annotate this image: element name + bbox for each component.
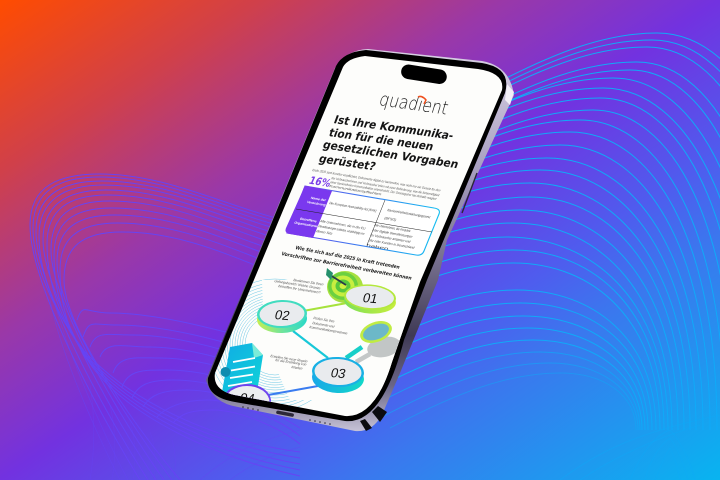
label 01: Geltungsbereich: Welche Gesetze <box>274 279 321 290</box>
table: cells: deren Sitz <box>316 229 333 236</box>
phone: bottom ports and speaker <box>242 406 331 425</box>
connector 02-03 <box>293 331 328 358</box>
connector 01-02 <box>303 303 347 311</box>
table: row heading 2: Betroffene <box>299 217 318 223</box>
table: row heading 1 <box>308 196 326 207</box>
logo: quadient <box>380 96 448 114</box>
disc 02: 02 <box>273 307 291 323</box>
phone: side walls <box>206 49 514 431</box>
table: purple header column <box>286 186 332 238</box>
label 01: betreffen Ihr Unternehmen? <box>278 284 321 295</box>
disc 01: 01 <box>361 290 379 306</box>
phone: white screen <box>215 56 502 416</box>
intro paragraph: einer barrierefreien Kommunikation unterstreicht. Der Gesetzgeber hat deshalb reagiert <box>330 180 437 201</box>
label 02: Dokumente und <box>312 321 335 329</box>
label 03: Erstellen Sie neue Regeln <box>270 354 308 363</box>
table: cells: für Verbraucher anbieten und <box>370 233 411 244</box>
disc 04 <box>226 384 271 402</box>
intro paragraph: der Verbraucherinnen und Verbraucher leben mit einer Behinderung, was die Notwendigkeit <box>331 176 440 197</box>
table: cells: Sitz oder Kunden in Deutschland <box>368 238 415 250</box>
document lines <box>228 358 255 386</box>
section heading: Wie Sie sich auf die 2025 in Kraft tretenden <box>294 245 401 271</box>
table: cells: Dienstleistungen anbieten, unabhängig von <box>318 224 365 236</box>
disc 01 <box>344 284 396 314</box>
icon: document <box>220 343 263 395</box>
document binder dot <box>220 367 230 377</box>
table: cells: oder digitale Dienstleistungen <box>372 228 413 239</box>
icon: target <box>326 268 363 303</box>
label 03: Inhalten <box>291 365 303 371</box>
white mask behind diagram <box>262 280 420 400</box>
label 03 <box>270 354 308 371</box>
table: row heading 2: Organisationen <box>294 221 319 228</box>
label 02: Kommunikationsprozesse <box>309 325 348 335</box>
decorative concentric arcs <box>215 278 312 407</box>
table: cells: (BFSG) <box>384 216 397 222</box>
label 02: Prüfen Sie Ihre <box>313 316 335 323</box>
screen content <box>209 89 461 418</box>
phone: side wall antenna stripes <box>360 84 514 431</box>
section heading: Vorschriften zur Barrierefreiheit vorbereiten können <box>280 251 413 282</box>
disc 03 <box>311 356 365 394</box>
icon: orange logo accent <box>418 96 426 104</box>
table: cells: haben <box>366 243 389 251</box>
icon: dart <box>330 275 346 285</box>
wave lines: right contour <box>337 33 720 480</box>
title <box>318 115 458 170</box>
disc 03: 03 <box>329 365 347 381</box>
phone: black bezel <box>208 50 506 421</box>
logo: quadient: quadient <box>377 89 451 119</box>
table <box>286 186 439 255</box>
title: gerüstet? <box>317 152 378 173</box>
label 02 <box>309 316 348 335</box>
phone: side button <box>462 173 477 213</box>
table: cells: Der European Accessibility Act (EAA) <box>329 201 377 213</box>
section heading <box>280 245 413 282</box>
table: row heading 1: Verordnung <box>306 200 326 207</box>
intro paragraph: Kommunikationspflichten <box>329 184 382 196</box>
table: cells: Alle Unternehmen, die Produkte <box>374 223 411 233</box>
intro paragraph: Ende 2025 sind Kunden verpflichtet, Dokumente digital zu barrierefrei, was nicht nur ein Gesetz für den <box>312 168 441 192</box>
table: row heading 1: Name der <box>310 196 327 202</box>
disc 04: 04 <box>238 390 256 406</box>
table: cells: Alle Unternehmen, die in der EU <box>320 219 367 231</box>
wave lines: left contour <box>30 174 300 480</box>
connector 03-04 <box>268 386 318 395</box>
title: Ist Ihre Kommunika- <box>332 113 456 143</box>
table: row heading 2 <box>294 218 318 228</box>
table: outline <box>287 186 439 255</box>
magnifier handle <box>346 347 362 358</box>
title: tion für die neuen <box>327 126 436 153</box>
table: cells: Barrierefreiheitsstärkungsgesetz <box>387 208 431 219</box>
label 01: Bestimmen Sie Ihren <box>293 278 324 286</box>
disc 02 <box>257 299 307 334</box>
magnifier shadow <box>367 336 400 358</box>
table: dividers <box>296 200 432 245</box>
phone: notch <box>400 63 448 85</box>
table: cells <box>316 201 431 251</box>
title: gesetzlichen Vorgaben <box>321 138 461 171</box>
icon: magnifier <box>346 317 403 362</box>
label 03: für die Erstellung von <box>275 358 307 367</box>
stat: 16%: 16% <box>307 174 333 190</box>
